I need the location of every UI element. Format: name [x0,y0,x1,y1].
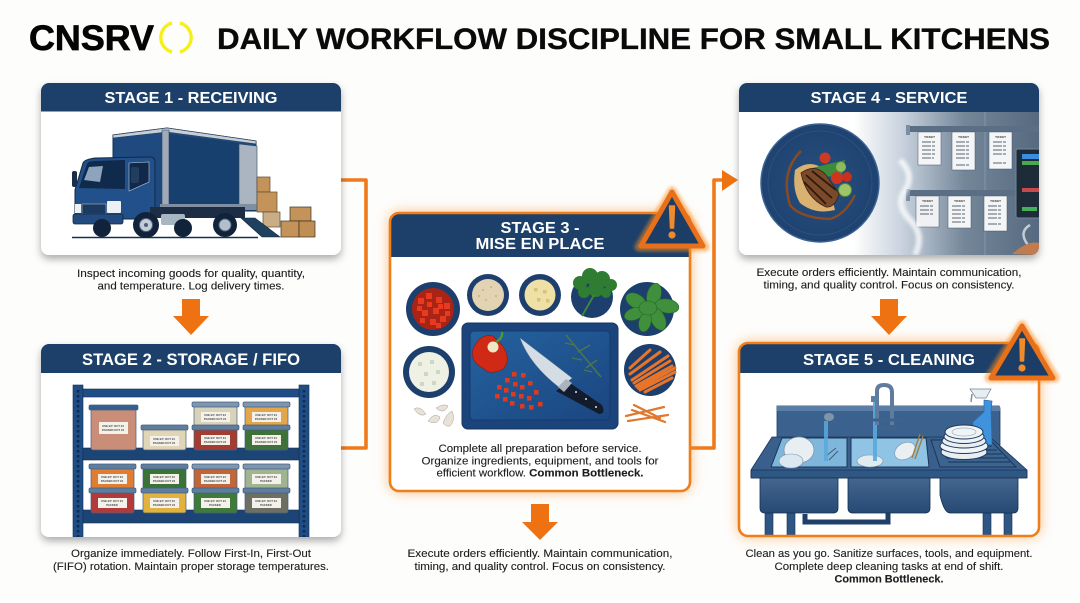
header: stage 4 [739,83,1039,112]
logo: CNSRV: CNSRV [29,19,155,58]
text: stage 3 description: Organize ingredients, equipment, and tools for [422,456,659,468]
text: stage 3 description: efficient workflow. Common Bottleneck. [436,468,644,480]
container labels: USE BY: OCT 24 [255,436,277,440]
text: stage 4 description: timing, and quality control. Focus on consistency. [764,280,1014,292]
text: stage 2 description [53,548,329,573]
tickets: TICKET [954,199,965,203]
bowls of prepared ingredients [403,268,680,426]
header: stage 4: STAGE 4 - SERVICE [810,90,968,107]
panel: stage 2 storage [41,344,341,537]
text: stage 3 lower description: timing, and quality control. Focus on consistency. [414,561,666,573]
panel: stage 4 service [739,83,1046,255]
containers: upper shelf [89,402,290,450]
arrow: stage 4 to stage 5 [871,299,907,335]
icon: warning triangle stage 3 [639,191,705,247]
tickets: TICKET [922,199,933,203]
text: stage 5 description: Common Bottleneck. [834,574,944,586]
arrow: stage 1 to stage 2 [173,299,209,335]
text: stage 5 description: Complete deep cleaning tasks at end of shift. [774,561,1004,573]
icon: delivery truck with boxes [72,128,315,238]
container labels: PACKED [260,479,272,483]
container labels [98,412,281,508]
container labels: USE BY: OCT 24 [204,499,226,503]
title: DAILY WORKFLOW DISCIPLINE FOR SMALL KITCHENS [217,23,1050,56]
container labels: USE BY: OCT 24 [101,499,123,503]
text: stage 2 description: (FIFO) rotation. Maintain proper storage temperatures. [53,561,329,573]
container labels: PACKED OCT 24 [255,417,278,421]
text: stage 2 description: Organize immediately. Follow First-In, First-Out [71,548,311,560]
arrow: connector from stages 1 and 2 to stage 3 [341,180,366,448]
text: stage 3 description [422,443,659,480]
container labels: PACKED OCT 24 [153,441,176,445]
illustration: ticket rail and plated meal [739,111,1046,255]
icon: warning triangle stage 5 [989,325,1055,378]
container labels: PACKED OCT 24 [102,428,125,432]
tickets: TICKET [958,135,969,139]
kitchen display screen [1016,148,1039,218]
container labels: PACKED OCT 24 [255,440,278,444]
header: stage 1: STAGE 1 - RECEIVING [104,90,278,107]
arrow: stage 3 downward [522,504,558,540]
container labels: USE BY: OCT 24 [204,475,226,479]
icon: storage shelf with labelled containers [73,385,309,537]
container labels: PACKED OCT 24 [204,440,227,444]
text: stage 3 lower description [408,548,672,573]
container labels: USE BY: OCT 24 [255,475,277,479]
header: stage 5 [740,344,1008,373]
container labels: PACKED [209,503,221,507]
panel: stage 5 cleaning (bottleneck) [739,325,1055,536]
containers: lower shelf [89,464,290,513]
container labels: PACKED OCT 24 [204,479,227,483]
container labels: USE BY: OCT 24 [153,437,175,441]
container labels: USE BY: OCT 24 [153,499,175,503]
container labels: PACKED [106,503,118,507]
plated meal [761,124,879,242]
tickets [916,132,1012,231]
text: stage 3 description: Complete all preparation before service. [438,443,642,455]
header: stage 2 [41,344,341,373]
header: stage 3: STAGE 3 - [500,220,580,237]
text: stage 1 description: Inspect incoming goods for quality, quantity, [77,268,305,280]
tickets: TICKET [995,135,1006,139]
icon: cutting board with pepper and knife [462,323,618,429]
tickets: TICKET [924,135,935,139]
container labels: PACKED [260,503,272,507]
container labels: USE BY: OCT 24 [255,499,277,503]
container labels: PACKED OCT 24 [153,503,176,507]
text: stage 1 description: and temperature. Log delivery times. [98,280,284,292]
container labels: USE BY: OCT 24 [101,475,123,479]
text: stage 1 description [77,268,305,292]
container labels: PACKED OCT 24 [101,479,124,483]
container labels: USE BY: OCT 24 [153,475,175,479]
header: stage 2: STAGE 2 - STORAGE / FIFO [82,350,300,369]
container labels: USE BY: OCT 24 [255,413,277,417]
text: stage 4 description: Execute orders efficiently. Maintain communication, [756,267,1022,279]
header: stage 3 [390,213,690,257]
container labels: PACKED OCT 24 [153,479,176,483]
panel: stage 3 mise en place (bottleneck) [390,191,705,491]
container labels: PACKED OCT 24 [204,417,227,421]
header: stage 3: MISE EN PLACE [476,236,605,253]
text: stage 4 description [756,267,1022,292]
container labels: USE BY: OCT 24 [102,424,124,428]
container labels: USE BY: OCT 24 [204,436,226,440]
header: stage 1 [41,83,341,112]
header: stage 5: STAGE 5 - CLEANING [803,352,975,369]
text: stage 5 description [746,548,1032,586]
container labels: USE BY: OCT 24 [204,413,226,417]
arrow: connector from stage 3 to stage 4 [690,170,738,448]
text: stage 3 lower description: Execute orders efficiently. Maintain communication, [408,548,672,560]
tickets: TICKET [990,199,1001,203]
icon: three compartment sink [751,385,1027,536]
text: stage 5 description: Clean as you go. Sanitize surfaces, tools, and equipment. [746,548,1032,560]
panel: stage 1 receiving [41,83,341,255]
